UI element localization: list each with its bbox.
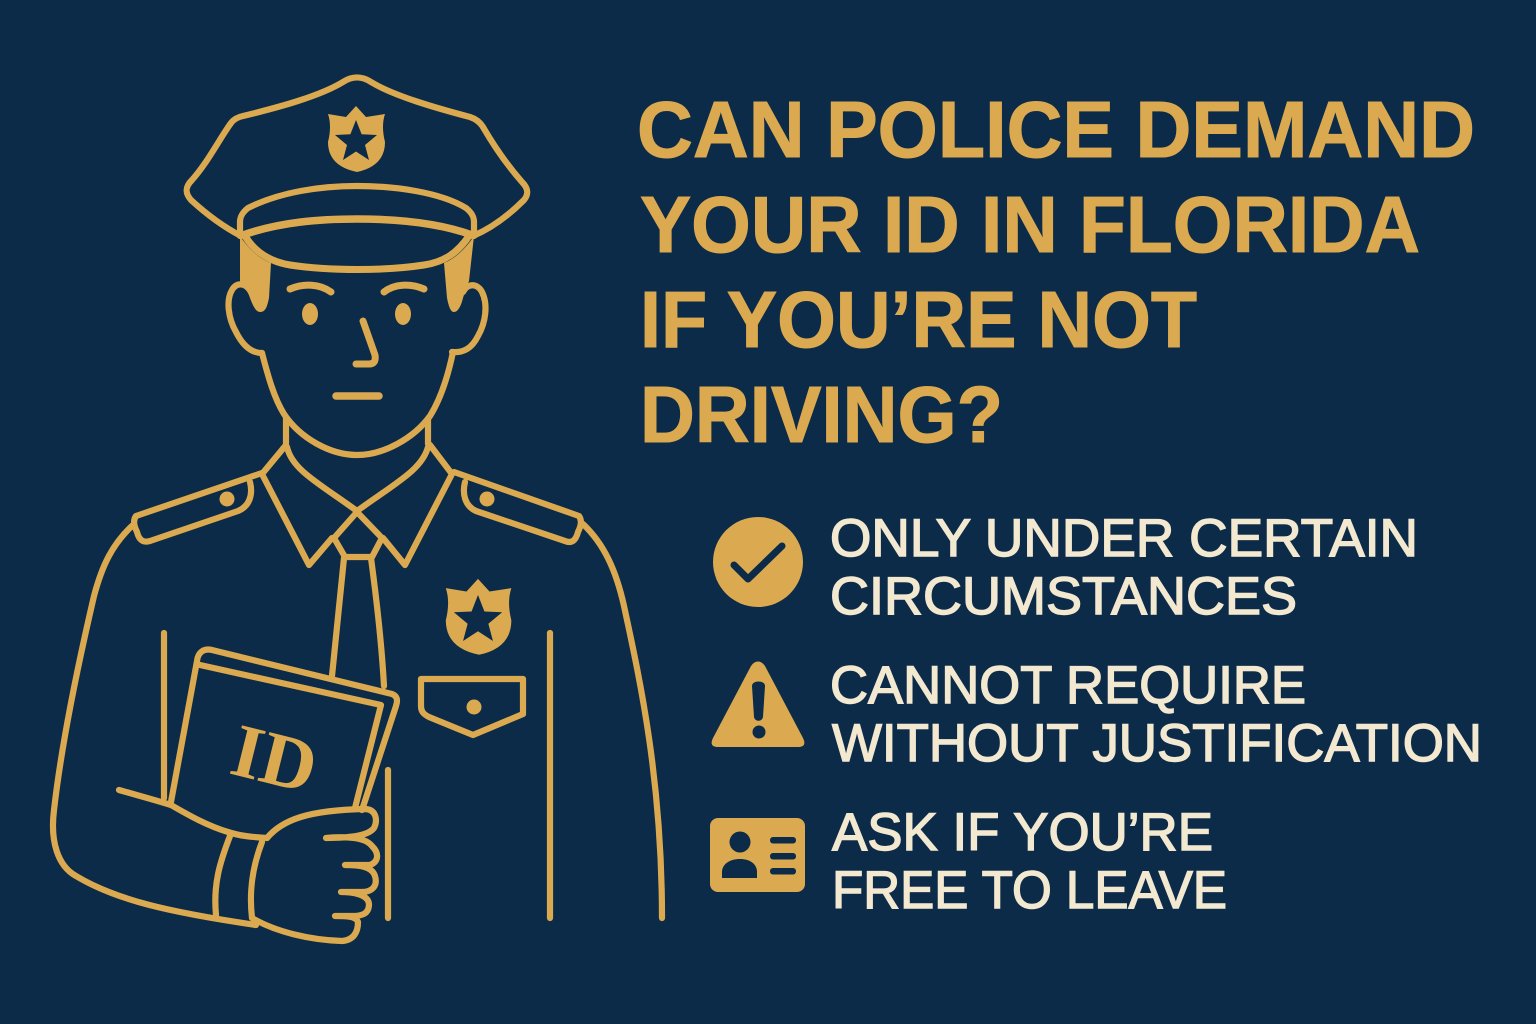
officer cap (187, 78, 527, 270)
text: item 1: CIRCUMSTANCES (830, 567, 1297, 626)
shirt placket lines (164, 633, 550, 918)
head: ears and face (229, 284, 485, 455)
title: IF YOU’RE NOT (640, 275, 1197, 364)
eyes (302, 303, 318, 325)
title: CAN POLICE DEMAND (637, 85, 1475, 174)
icon: ID card (710, 818, 805, 892)
tie knot (334, 512, 382, 557)
ID label: ID (223, 708, 326, 810)
text: item 1 (830, 509, 1418, 626)
item: cannot require without justification (712, 656, 1482, 773)
title (637, 85, 1475, 459)
text: item 3 (832, 803, 1227, 920)
icon: warning triangle (712, 662, 804, 747)
item: only under certain circumstances (713, 509, 1418, 626)
text: item 2: WITHOUT JUSTIFICATION (832, 714, 1482, 773)
title: DRIVING? (640, 370, 1003, 459)
text: item 3: FREE TO LEAVE (832, 861, 1227, 920)
text: item 2: CANNOT REQUIRE (830, 656, 1306, 715)
hand (252, 809, 377, 941)
ID book (171, 649, 397, 810)
chest pocket (421, 679, 523, 735)
text: item 1: ONLY UNDER CERTAIN (830, 509, 1418, 568)
brows (290, 285, 331, 292)
hair sideburns (240, 236, 474, 312)
illustration: police officer holding ID (53, 78, 662, 941)
title: YOUR ID IN FLORIDA (640, 180, 1420, 269)
item: ask if you're free to leave (710, 803, 1227, 920)
shoulders and epaulettes (134, 472, 581, 542)
nose (356, 321, 375, 364)
forearm and cuff (119, 790, 267, 918)
neck and collar (262, 418, 452, 565)
text: item 2 (830, 656, 1482, 773)
mouth (336, 392, 379, 400)
tie (332, 558, 384, 686)
cap badge (328, 106, 385, 172)
icon: check mark (713, 517, 803, 607)
chest badge (446, 579, 511, 655)
text: item 3: ASK IF YOU’RE (832, 803, 1213, 862)
sleeves (53, 524, 662, 925)
